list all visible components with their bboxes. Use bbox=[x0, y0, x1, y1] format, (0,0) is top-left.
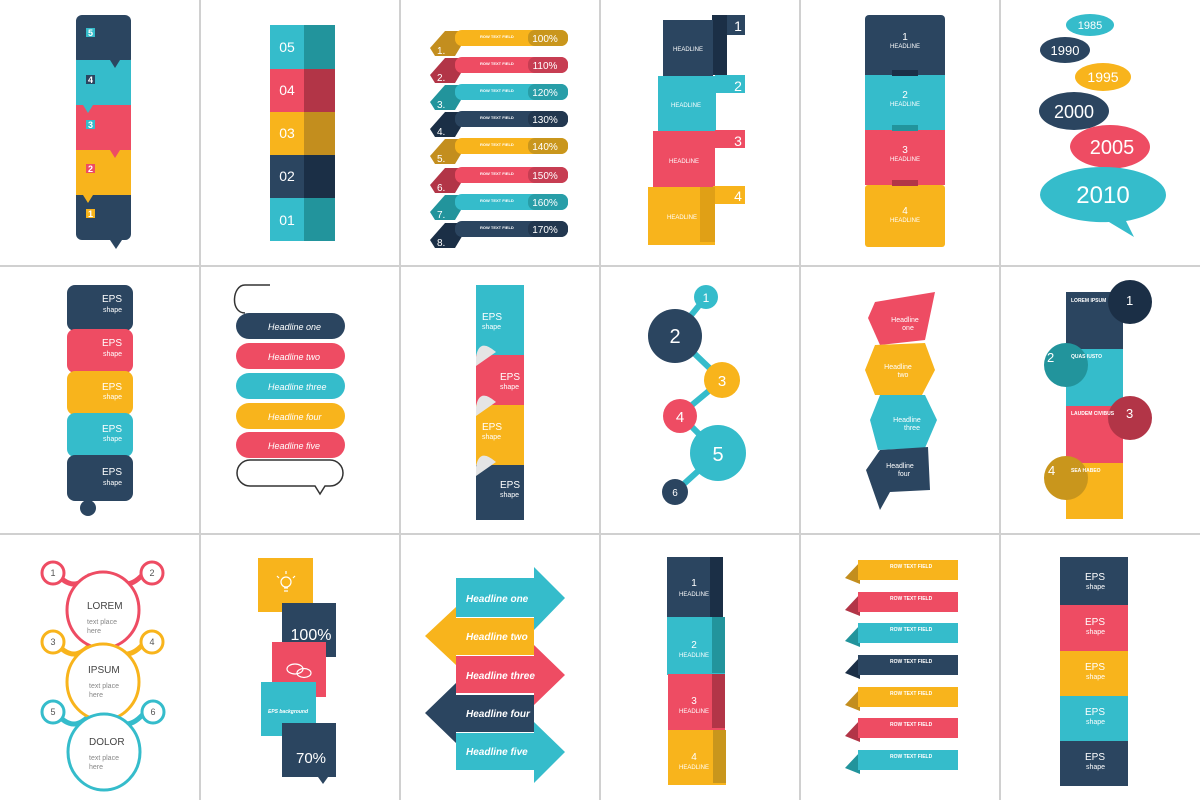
panel: ring circles with numbers: 3 bbox=[50, 637, 56, 647]
panel: curled corner strip: EPS bbox=[482, 422, 502, 433]
panel: tabbed vertical headlines: HEADLINE bbox=[890, 102, 920, 108]
panel: column with side circles: LAUDEM CIVIBUS bbox=[1071, 411, 1115, 417]
panel: folded row ribbons: ROW TEXT FIELD bbox=[890, 596, 933, 602]
panel: ring circles with numbers: 1 bbox=[50, 568, 56, 578]
panel: EPS shape column: EPS bbox=[1085, 752, 1105, 763]
panel: folded row ribbons: ROW TEXT FIELD bbox=[890, 659, 933, 665]
panel: percentage ribbons: 160% bbox=[532, 198, 558, 209]
panel: percentage ribbons: 3. bbox=[437, 100, 445, 111]
panel: zigzag polygons: Headline bbox=[884, 364, 912, 371]
panel: 3D numbered column: 04 bbox=[279, 82, 295, 98]
panel: percentage ribbons: 2. bbox=[437, 73, 445, 84]
panel: column with side circles: 1 bbox=[1126, 293, 1133, 308]
panel: column with side circles: LOREM IPSUM bbox=[1071, 298, 1106, 304]
panel: curled corner strip: shape bbox=[482, 324, 501, 331]
panel: tabbed vertical headlines: HEADLINE bbox=[890, 218, 920, 224]
panel: numbered step column: 4 bbox=[88, 75, 93, 85]
panel: folded row ribbons: ROW TEXT FIELD bbox=[890, 564, 933, 570]
panel: percentage ribbons: 110% bbox=[533, 61, 558, 72]
panel: pill headlines with outline: Headline four bbox=[268, 412, 323, 422]
panel: 3D numbered column: 05 bbox=[279, 39, 295, 55]
panel: zigzag polygons: four bbox=[898, 471, 911, 478]
panel: stepped headline boxes: 4 bbox=[734, 188, 742, 204]
panel: pill headlines with outline: Headline five bbox=[268, 441, 320, 451]
panel: puzzle stack: EPS bbox=[102, 382, 122, 393]
panel: ring circles with numbers: text place bbox=[89, 683, 119, 690]
panel: percentage ribbons: 8. bbox=[437, 238, 445, 249]
panel: ring circles with numbers: here bbox=[89, 692, 103, 699]
panel: folded headline column: 4 bbox=[691, 752, 697, 763]
panel: ring circles with numbers: here bbox=[89, 764, 103, 771]
panel: percentage ribbons: ROW TEXT FIELD bbox=[480, 115, 514, 120]
panel: EPS shape column: EPS bbox=[1085, 617, 1105, 628]
panel: percentage ribbons: 4. bbox=[437, 127, 445, 138]
panel: zigzag polygons: two bbox=[898, 372, 909, 379]
panel: speech bubble squares bbox=[258, 558, 336, 784]
panel: percentage ribbons: ROW TEXT FIELD bbox=[480, 88, 514, 93]
panel: year bubbles timeline bbox=[1039, 14, 1166, 237]
panel: percentage ribbons: 170% bbox=[532, 225, 558, 236]
panel: stepped headline boxes: 1 bbox=[734, 18, 742, 34]
panel: tabbed vertical headlines bbox=[865, 15, 945, 247]
panel: folded headline column bbox=[667, 557, 726, 785]
panel: puzzle stack: shape bbox=[103, 436, 122, 443]
panel: column with side circles: 3 bbox=[1126, 406, 1133, 421]
panel: 3D numbered column: 02 bbox=[279, 168, 295, 184]
panel: curled corner strip: EPS bbox=[500, 372, 520, 383]
panel: puzzle stack: shape bbox=[103, 351, 122, 358]
panel: ring circles with numbers: text place bbox=[87, 619, 117, 626]
panel: connected circles: 2 bbox=[669, 326, 681, 348]
panel: connected circles: 5 bbox=[712, 444, 724, 466]
panel: puzzle stack: EPS bbox=[102, 294, 122, 305]
panel: tabbed vertical headlines: 2 bbox=[902, 90, 908, 101]
panel: percentage ribbons: ROW TEXT FIELD bbox=[480, 225, 514, 230]
panel: pill headlines with outline: Headline one bbox=[268, 322, 321, 332]
panel: stepped headline boxes: 3 bbox=[734, 133, 742, 149]
panel: connected circles: 6 bbox=[672, 488, 678, 499]
panel: folded headline column: HEADLINE bbox=[679, 653, 709, 659]
panel: folded headline column: 1 bbox=[691, 578, 697, 589]
panel: column with side circles: QUAS IUSTO bbox=[1071, 354, 1102, 360]
panel: headline arrows bbox=[425, 567, 565, 783]
panel: curled corner strip: shape bbox=[482, 434, 501, 441]
panel: percentage ribbons: ROW TEXT FIELD bbox=[480, 198, 514, 203]
panel: ring circles with numbers: 6 bbox=[150, 707, 156, 717]
panel: puzzle stack: EPS bbox=[102, 467, 122, 478]
panel: EPS shape column: EPS bbox=[1085, 707, 1105, 718]
panel: column with side circles: 2 bbox=[1047, 350, 1054, 365]
panel: zigzag polygons: Headline bbox=[893, 417, 921, 424]
panel: speech bubble squares: 100% bbox=[291, 627, 331, 644]
panel: speech bubble squares: EPS background bbox=[268, 709, 309, 715]
panel: folded headline column: HEADLINE bbox=[679, 592, 709, 598]
panel: folded headline column: 2 bbox=[691, 640, 697, 651]
panel: folded row ribbons: ROW TEXT FIELD bbox=[890, 722, 933, 728]
panel: curled corner strip: shape bbox=[500, 492, 519, 499]
panel: ring circles with numbers: LOREM bbox=[87, 601, 123, 612]
panel: 3D numbered column bbox=[270, 25, 335, 241]
panel: headline arrows: Headline three bbox=[466, 671, 535, 682]
panel: zigzag polygons: Headline bbox=[891, 317, 919, 324]
panel: stepped headline boxes: HEADLINE bbox=[673, 47, 703, 53]
panel: numbered step column: 1 bbox=[88, 209, 93, 219]
panel: column with side circles: SEA HABEO bbox=[1071, 468, 1101, 474]
panel: numbered step column bbox=[76, 15, 131, 249]
panel: stepped headline boxes: 2 bbox=[734, 78, 742, 94]
panel: percentage ribbons: 120% bbox=[532, 88, 558, 99]
panel: folded headline column: HEADLINE bbox=[679, 765, 709, 771]
panel: folded row ribbons: ROW TEXT FIELD bbox=[890, 691, 933, 697]
panel: pill headlines with outline: Headline two bbox=[268, 352, 320, 362]
panel: tabbed vertical headlines: HEADLINE bbox=[890, 44, 920, 50]
panel: stepped headline boxes: HEADLINE bbox=[667, 215, 697, 221]
panel: percentage ribbons: 7. bbox=[437, 210, 445, 221]
panel: connected circles: 4 bbox=[676, 409, 684, 426]
panel: headline arrows: Headline four bbox=[466, 709, 531, 720]
panel: year bubbles timeline: 1985 bbox=[1078, 20, 1102, 32]
panel: pill headlines with outline: Headline three bbox=[268, 382, 327, 392]
panel: 3D numbered column: 01 bbox=[279, 212, 295, 228]
panel: connected circles: 3 bbox=[718, 373, 726, 390]
panel: curled corner strip: EPS bbox=[500, 480, 520, 491]
panel: tabbed vertical headlines: HEADLINE bbox=[890, 157, 920, 163]
panel: folded row ribbons: ROW TEXT FIELD bbox=[890, 754, 933, 760]
panel: headline arrows: Headline five bbox=[466, 747, 528, 758]
panel: percentage ribbons: ROW TEXT FIELD bbox=[480, 61, 514, 66]
panel: puzzle stack: EPS bbox=[102, 338, 122, 349]
panel: zigzag polygons: three bbox=[904, 425, 920, 432]
panel: tabbed vertical headlines: 1 bbox=[902, 32, 908, 43]
panel: year bubbles timeline: 1995 bbox=[1087, 69, 1119, 85]
panel: year bubbles timeline: 2000 bbox=[1054, 102, 1094, 122]
panel: connected circles bbox=[648, 285, 746, 505]
panel: percentage ribbons bbox=[430, 30, 568, 249]
panel: curled corner strip bbox=[476, 285, 524, 520]
icon: light bulb bbox=[277, 571, 295, 591]
panel: connected circles: 1 bbox=[703, 291, 710, 305]
panel: folded row ribbons bbox=[845, 560, 958, 774]
panel: folded headline column: 3 bbox=[691, 696, 697, 707]
panel: numbered step column: 3 bbox=[88, 120, 93, 130]
panel: column with side circles bbox=[1044, 280, 1152, 519]
panel: ring circles with numbers bbox=[42, 562, 164, 790]
panel: tabbed vertical headlines: 3 bbox=[902, 145, 908, 156]
panel: percentage ribbons: 5. bbox=[437, 154, 445, 165]
panel: numbered step column: 5 bbox=[88, 28, 93, 38]
panel: curled corner strip: EPS bbox=[482, 312, 502, 323]
panel: ring circles with numbers: text place bbox=[89, 755, 119, 762]
panel: percentage ribbons: 150% bbox=[532, 171, 558, 182]
panel: column with side circles: 4 bbox=[1048, 463, 1055, 478]
panel: percentage ribbons: ROW TEXT FIELD bbox=[480, 142, 514, 147]
panel: EPS shape column: EPS bbox=[1085, 572, 1105, 583]
panel: percentage ribbons: ROW TEXT FIELD bbox=[480, 34, 514, 39]
panel: percentage ribbons: 100% bbox=[532, 34, 558, 45]
panel: folded row ribbons: ROW TEXT FIELD bbox=[890, 627, 933, 633]
panel: year bubbles timeline: 2005 bbox=[1090, 137, 1134, 159]
panel: EPS shape column: shape bbox=[1086, 674, 1105, 681]
panel: 3D numbered column: 03 bbox=[279, 125, 295, 141]
panel: puzzle stack: shape bbox=[103, 480, 122, 487]
panel: EPS shape column bbox=[1060, 557, 1128, 786]
panel: curled corner strip: shape bbox=[500, 384, 519, 391]
panel: stepped headline boxes: HEADLINE bbox=[669, 159, 699, 165]
panel: percentage ribbons: 130% bbox=[532, 115, 558, 126]
panel: ring circles with numbers: 5 bbox=[50, 707, 56, 717]
panel: folded headline column: HEADLINE bbox=[679, 709, 709, 715]
panel: percentage ribbons: 140% bbox=[532, 142, 558, 153]
panel: zigzag polygons bbox=[865, 292, 937, 510]
panel: headline arrows: Headline two bbox=[466, 632, 528, 643]
panel: year bubbles timeline: 1990 bbox=[1051, 43, 1079, 58]
panel: percentage ribbons: ROW TEXT FIELD bbox=[480, 171, 514, 176]
panel: puzzle stack: shape bbox=[103, 394, 122, 401]
panel: ring circles with numbers: DOLOR bbox=[89, 737, 125, 748]
panel: tabbed vertical headlines: 4 bbox=[902, 206, 908, 217]
panel: numbered step column: 2 bbox=[88, 164, 93, 174]
panel: ring circles with numbers: IPSUM bbox=[88, 665, 120, 676]
panel: zigzag polygons: Headline bbox=[886, 463, 914, 470]
panel: headline arrows: Headline one bbox=[466, 594, 529, 605]
panel: puzzle stack: EPS bbox=[102, 424, 122, 435]
panel: puzzle stack: shape bbox=[103, 307, 122, 314]
panel: ring circles with numbers: 2 bbox=[149, 568, 155, 578]
panel: percentage ribbons: 1. bbox=[437, 46, 445, 57]
icon: speech bubbles bbox=[287, 664, 311, 678]
panel: ring circles with numbers: 4 bbox=[149, 637, 155, 647]
panel: EPS shape column: shape bbox=[1086, 719, 1105, 726]
panel: stepped headline boxes: HEADLINE bbox=[671, 103, 701, 109]
panel: EPS shape column: EPS bbox=[1085, 662, 1105, 673]
panel: puzzle stack bbox=[67, 285, 133, 516]
panel: speech bubble squares: 70% bbox=[296, 750, 326, 767]
panel: EPS shape column: shape bbox=[1086, 764, 1105, 771]
panel: zigzag polygons: one bbox=[902, 325, 914, 332]
panel: year bubbles timeline: 2010 bbox=[1076, 182, 1130, 209]
panel: ring circles with numbers: here bbox=[87, 628, 101, 635]
panel: percentage ribbons: 6. bbox=[437, 183, 445, 194]
panel: EPS shape column: shape bbox=[1086, 629, 1105, 636]
panel: stepped headline boxes bbox=[648, 15, 745, 245]
panel: EPS shape column: shape bbox=[1086, 584, 1105, 591]
panel: pill headlines with outline bbox=[234, 285, 345, 494]
